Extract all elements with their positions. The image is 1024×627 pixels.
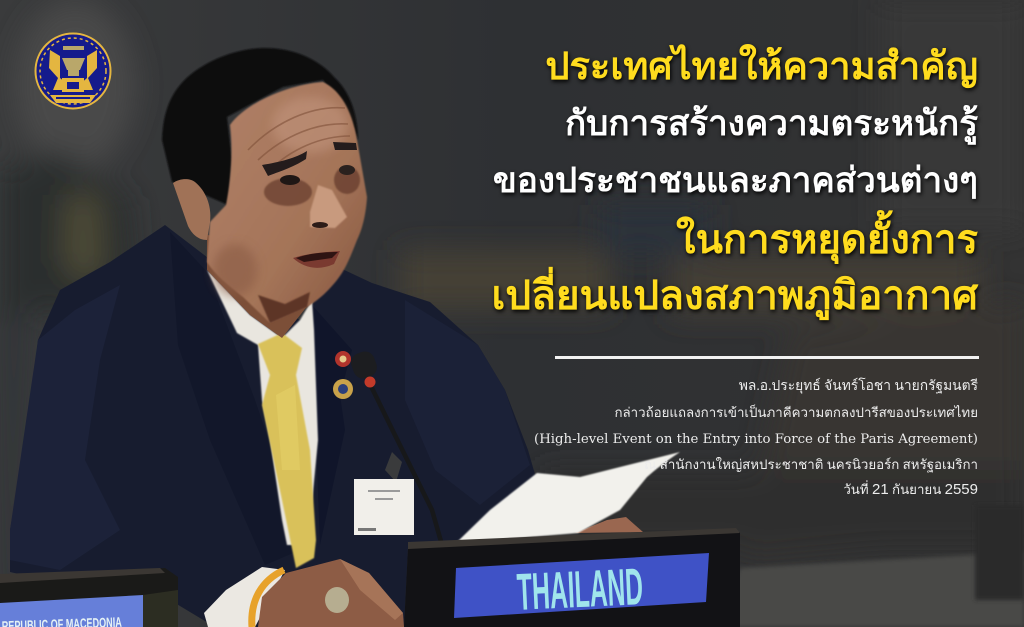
microphone [348,349,442,545]
badge [354,452,414,535]
text: ในการหยุดยั้งการ [676,218,978,262]
ring [325,587,349,613]
text: กับการสร้างความตระหนักรู้ [565,104,978,143]
government seal [36,34,110,108]
lapel pins [333,351,353,399]
cheek shade [213,244,257,296]
right hand with paper [575,517,643,533]
text: ประเทศไทยให้ความสำคัญ [545,46,978,88]
shirt collar and cuff [207,270,318,545]
text: กล่าวถ้อยแถลงการเข้าเป็นภาคีความตกลงปารีสของประเทศไทย [614,405,978,420]
title [492,44,980,324]
face [207,82,367,323]
paper [456,452,680,543]
divider line [555,356,979,359]
text: วันที่ 21 กันยายน 2559 [843,481,978,498]
name plate: THAILAND [404,528,740,627]
tan backdrop between arm and microphone [383,500,442,578]
text: พล.อ.ประยุทธ์ จันทร์โอชา นายกรัฐมนตรี [739,378,978,393]
event details [534,378,978,498]
brows [262,151,307,176]
neck and head [162,48,367,338]
forearm hand [258,559,404,627]
name plate: THAILAND: THAILAND [516,558,644,622]
mouth [293,251,340,268]
name plate: neighbouring delegation [0,568,178,627]
text: ของประชาชนและภาคส่วนต่างๆ [493,161,978,200]
ear [173,179,210,240]
eye sockets [264,178,312,206]
forehead lines [248,108,350,170]
hair [162,48,358,205]
table [720,552,1024,627]
tie [258,333,316,568]
yellow wristband [252,570,284,627]
suit [10,225,540,627]
nose [310,185,347,228]
text: (High-level Event on the Entry into Force of the Paris Agreement) [534,432,978,447]
text: ณ สำนักงานใหญ่สหประชาชาติ นครนิวยอร์ก สหรัฐอเมริกา [644,457,978,472]
text: เปลี่ยนแปลงสภาพภูมิอากาศ [492,272,978,318]
